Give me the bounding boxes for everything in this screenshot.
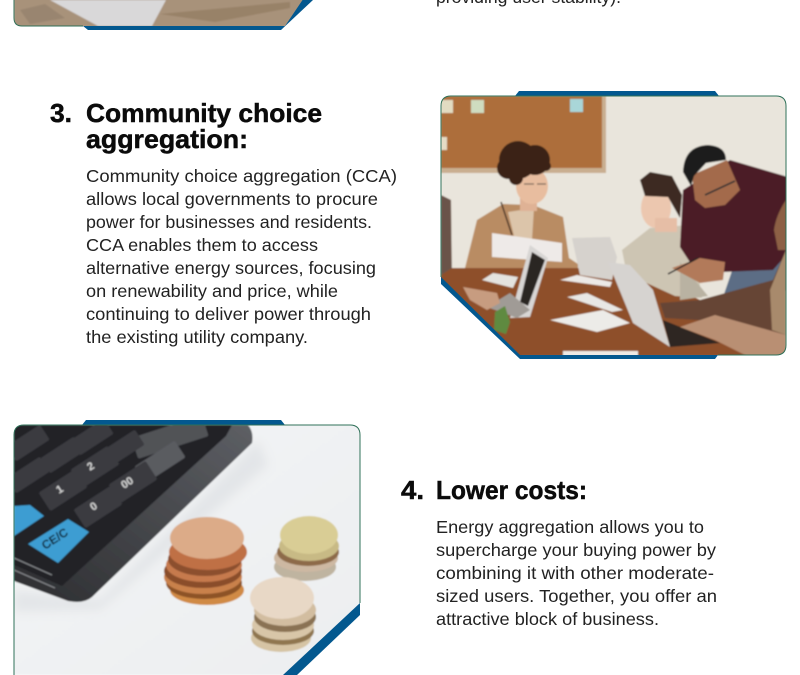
blue accent: top bar: [82, 420, 285, 425]
section 3 body text: the existing utility company.: [86, 327, 308, 347]
man: [724, 254, 786, 294]
tablet and papers: [572, 237, 617, 280]
section 4 body text: attractive block of business.: [436, 609, 659, 629]
section 3 heading: [86, 98, 322, 154]
section 3 body text: [86, 166, 397, 347]
right laptop: [608, 262, 670, 347]
photo: 1: [54, 483, 66, 497]
photo: 2: [85, 460, 97, 474]
section 3 body text: allows local governments to procure: [86, 189, 378, 209]
blue accent: bottom-right bevel: [283, 603, 360, 675]
coin stack: copper: [169, 584, 245, 606]
calculator keys: [14, 426, 209, 528]
section 4 body text: combining it with other moderate-: [436, 563, 714, 583]
photo: 0: [88, 500, 100, 514]
photo outline: [14, 425, 360, 675]
photo: 00: [119, 475, 136, 492]
section 4 heading: Lower costs:: [436, 475, 587, 505]
photo outline: [441, 96, 786, 355]
woman center: [622, 225, 702, 298]
section 3 body text: continuing to deliver power through: [86, 304, 371, 324]
photo: [6, 415, 360, 675]
woman left: [465, 204, 578, 275]
section 3 body text: on renewability and price, while: [86, 281, 338, 301]
section 3 body text: power for businesses and residents.: [86, 212, 372, 232]
coin stack: gold: [273, 562, 336, 582]
section 3 heading: Community choice: [86, 98, 322, 128]
left laptop: [510, 245, 548, 318]
section 4 body text: [436, 517, 717, 629]
photo: CE/C: [39, 525, 71, 553]
section 3 body text: alternative energy sources, focusing: [86, 258, 376, 278]
image: top photo card with wood and paper: [14, 0, 316, 30]
photo: [441, 96, 790, 356]
section 4 number: 4.: [401, 475, 424, 505]
section 3 number: 3.: [50, 98, 72, 128]
section 3 body text: CCA enables them to access: [86, 235, 318, 255]
section 4 body text: Energy aggregation allows you to: [436, 517, 704, 537]
image: calculator and coins photo card: [6, 415, 360, 675]
person right: [660, 260, 782, 333]
section 4 body text: supercharge your buying power by: [436, 540, 716, 560]
table: [441, 267, 700, 302]
blue accent: bottom-left bevel: [441, 276, 718, 359]
section 3 heading: aggregation:: [86, 124, 248, 154]
calculator body: [14, 425, 252, 602]
coin stack: silver: [250, 633, 312, 653]
section 3 body text: Community choice aggregation (CCA): [86, 166, 397, 186]
blue accent: top bar: [515, 91, 719, 96]
section 4 body text: sized users. Together, you offer an: [436, 586, 717, 606]
image: team meeting photo card: [441, 91, 790, 359]
